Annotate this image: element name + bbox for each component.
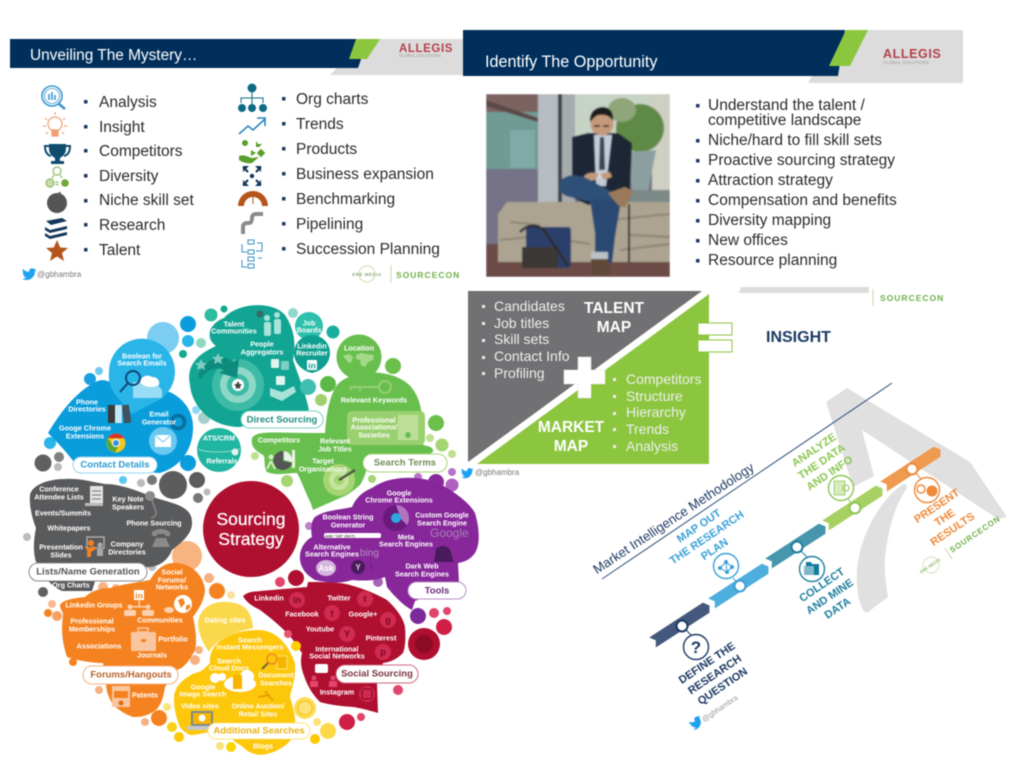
group: direct sourcing: Talent (224, 320, 245, 328)
step 5: present the results: RESULTS (929, 511, 977, 549)
list: left column: Insight (99, 119, 145, 136)
box: professional associations (347, 411, 425, 445)
panel: market intelligence methodology (590, 383, 1007, 731)
twitter handle (461, 468, 520, 478)
bubble: location: Location (344, 344, 374, 352)
bubble: linkedin recruiter: Linkedin (297, 342, 327, 350)
group: tools: Google (387, 488, 411, 498)
step 5: present the results: PRESENT (912, 487, 962, 526)
twitter handle (22, 268, 82, 280)
list: opportunity bullets: Compensation and benefits (708, 192, 897, 209)
icon: yahoo (351, 560, 373, 575)
step 4: analyze the data and info (788, 430, 886, 531)
icon: competitors pie (267, 450, 295, 470)
bubble: linkedin recruiter (294, 335, 330, 373)
pill: lists name generation (29, 563, 147, 581)
list: right column: Products (296, 141, 357, 158)
pill: forums hangouts: Forums/Hangouts (90, 670, 172, 680)
group: search terms: Relevant (320, 436, 351, 446)
icon: network (714, 554, 738, 578)
group: additional searches: Google (191, 682, 215, 692)
group: forums and hangouts: Professional (70, 616, 114, 626)
panel: identify the opportunity (463, 30, 963, 277)
icon: search bar: AND "OR" (NOT) (325, 534, 356, 538)
triangle: market map: Trends (626, 421, 669, 437)
step 3: collect and mine data: COLLECT (797, 566, 847, 605)
panel: talent map plus market map (461, 287, 944, 478)
group: contact details: Extensions (66, 432, 104, 440)
step 5: present the results (880, 444, 978, 549)
group: forums and hangouts: Networks (156, 582, 188, 592)
watermark: gray chevron logo (826, 388, 1007, 612)
icon: trends arrow (239, 118, 265, 134)
group: tools: Alternative (313, 542, 351, 552)
icon: research books (45, 218, 67, 239)
icon: social circles (289, 591, 396, 702)
twitter handle: @gbhambra (475, 468, 520, 477)
step 2: map out the research plan (660, 497, 772, 609)
panel: sourcing strategy bubble diagram (23, 305, 479, 755)
icon: linkedin with people: in (135, 590, 143, 600)
group: search terms: Organisations (299, 464, 347, 474)
icon: equals sign (698, 323, 732, 352)
group: additional searches (163, 602, 336, 755)
group: forums and hangouts: Patents (132, 690, 158, 700)
header bar: identify the opportunity (463, 30, 963, 83)
list: left column: Talent (99, 242, 141, 259)
triangle: market map: Structure (626, 388, 683, 404)
group: forums and hangouts: Portfolio (158, 634, 188, 644)
group: forums and hangouts: Journals (137, 650, 167, 660)
group: contact details: Boolean for (122, 352, 162, 360)
group: social sourcing (243, 570, 452, 730)
group: forums and hangouts (44, 541, 235, 726)
list: right column: Business expansion (296, 166, 434, 183)
step 4: analyze the data and info: AND INFO (804, 454, 856, 493)
group: additional searches: Online Auction/ (232, 702, 284, 710)
box: professional associations: Associations/ (351, 422, 397, 432)
list: left column: Competitors (99, 143, 183, 160)
icon: presenter (84, 537, 104, 557)
icon: laptop (186, 711, 214, 730)
icon: succession boxes (242, 240, 262, 268)
group: search terms: Relevant Keywords (341, 396, 407, 404)
group: forums and hangouts: Forums/ (158, 576, 186, 584)
icon: chrome logo (106, 434, 126, 452)
icon: cloud with docs (210, 670, 256, 692)
group: lists and name generation (23, 452, 210, 597)
icon: analysis magnifier (42, 86, 65, 109)
step 5: present the results: THE (933, 507, 957, 529)
group: social sourcing: Twitter (327, 594, 351, 602)
icon: magnifier document (262, 654, 287, 669)
group: lists and name generation: Key Note (112, 494, 144, 504)
icon: envelope with cloud (120, 371, 162, 398)
icon: insight light bulb (43, 112, 67, 136)
step 1: define the research question (649, 600, 753, 710)
group: tools (300, 468, 479, 610)
icon: dark red badge (408, 628, 440, 660)
group: contact details: Generator (142, 418, 176, 426)
logo: sourcecon top (739, 287, 944, 306)
logo: ere media sourcecon rotated (919, 514, 1002, 575)
icon: key (351, 381, 391, 393)
icon: pipeline (243, 214, 263, 234)
step 4: analyze the data and info: THE DATA (796, 442, 848, 482)
triangle: talent map: Job titles (494, 315, 549, 331)
icon: social circles: f (330, 609, 334, 619)
group: tools: Meta (398, 532, 415, 542)
step 2: map out the research plan: PLAN (699, 536, 731, 563)
group: social sourcing: Social Networks (309, 652, 365, 660)
triangle: talent map: TALENT (584, 300, 645, 317)
icon: clipboard (828, 476, 854, 500)
bubble: ats crm referrals: Referrals (206, 456, 238, 466)
group: contact details: Email (149, 410, 169, 418)
icon: email gear (149, 416, 184, 455)
group: additional searches: Search (238, 636, 262, 644)
panel: unveiling the mystery (10, 39, 463, 283)
bubble: job boards: Boards (297, 326, 321, 334)
icon: org chart (238, 84, 266, 112)
group: additional searches: Search (217, 656, 241, 666)
icon: yahoo: ! (369, 561, 373, 575)
group: tools: Generator (331, 520, 365, 530)
pill: lists name generation: Lists/Name Generation (36, 566, 140, 578)
header bar: unveiling the mystery (10, 39, 463, 75)
twitter handle rotated: @gbhambra (700, 693, 740, 724)
group: lists and name generation: Company (111, 540, 143, 548)
group: additional searches: Blogs (253, 742, 273, 750)
triangle: market map (477, 294, 709, 464)
group: direct sourcing: People (250, 340, 274, 348)
pill: social sourcing: Social Sourcing (341, 668, 413, 680)
list: opportunity bullets: competitive landscape (708, 112, 861, 129)
group: social sourcing: Instagram (320, 688, 354, 696)
group: search terms (251, 334, 456, 510)
icon: briefcase (131, 628, 156, 651)
group: social sourcing: Linkedin (254, 594, 284, 602)
icon: diversity circles (46, 167, 69, 187)
pill: additional searches (208, 723, 310, 739)
group: contact details: Search Emails (117, 358, 167, 368)
triangle: market map: MAP (554, 438, 588, 455)
triangle: talent map: Skill sets (494, 331, 549, 347)
bubble: linkedin recruiter: Recruiter (296, 348, 328, 358)
logo: ere media sourcecon (352, 265, 460, 283)
list: left column: Diversity (99, 168, 159, 185)
pill: direct sourcing (241, 411, 323, 428)
icon: social circles: Y (344, 629, 350, 639)
triangle: market map: Analysis (626, 438, 678, 454)
group: forums and hangouts: Memberships (69, 624, 115, 634)
group: forums and hangouts: Social (161, 568, 183, 576)
group: direct sourcing (179, 305, 340, 472)
group: additional searches: Retail Sites (239, 710, 277, 718)
list: opportunity bullets: Diversity mapping (708, 212, 831, 229)
icon: people talking (310, 664, 337, 687)
box: professional associations: Professional (352, 416, 396, 424)
icon: books (108, 405, 131, 423)
group: tools: Chrome Extensions (365, 496, 433, 504)
group: search terms: Job Titles (318, 444, 352, 454)
icon: telephone (152, 529, 170, 547)
bubble: location (336, 334, 382, 380)
logo: ere media sourcecon: SOURCECON (396, 270, 460, 280)
icon: lists document (85, 486, 103, 506)
icon: search bar (324, 533, 381, 538)
group: lists and name generation: Conference (39, 484, 79, 494)
icon: ask: Ask (318, 563, 334, 573)
group: forums and hangouts: Associations (77, 642, 121, 650)
group: search terms: Target (312, 456, 334, 466)
group: contact details: Phone (76, 398, 98, 406)
group: lists and name generation: Phone Sourcing (126, 518, 182, 528)
group: social sourcing: Pinterest (366, 634, 397, 642)
group: contact details: Googe Chrome (59, 424, 111, 432)
list: right column: Trends (296, 116, 344, 133)
icon: dark helmet (434, 546, 454, 562)
triangle: market map: Hierarchy (626, 404, 686, 420)
triangle: talent map: Profiling (494, 365, 545, 381)
pill: search terms (363, 454, 447, 472)
step 3: collect and mine data: AND MINE (804, 577, 856, 617)
header bar: identify the opportunity: GLOBAL SOLUTIONS (883, 60, 929, 65)
icon: products hand (239, 140, 265, 163)
twitter handle: @gbhambra (37, 270, 82, 279)
group: additional searches: Video sites (181, 702, 219, 710)
pill: tools (408, 582, 466, 599)
logo: sourcecon top: SOURCECON (880, 293, 944, 303)
step 1: define the research question: QUESTION (696, 666, 750, 708)
group: tools: Google (430, 526, 469, 540)
icon: niche skill set dial (47, 192, 67, 213)
list: opportunity bullets: New offices (708, 232, 788, 249)
group: forums and hangouts: Linkedin Groups (65, 600, 123, 610)
step 2: map out the research plan: MAP OUT (675, 507, 724, 545)
list: opportunity bullets (696, 97, 897, 269)
group: tools: Custom Google (415, 510, 469, 520)
list: right column: Benchmarking (296, 191, 395, 208)
group: search terms: Competitors (258, 436, 300, 444)
group: social sourcing: International (315, 644, 359, 654)
label: insight: INSIGHT (766, 329, 831, 346)
icon: crosshair target (323, 464, 355, 496)
pill: additional searches: Additional Searches (213, 726, 305, 736)
group: lists and name generation: Events/Summits (35, 508, 91, 518)
icon: social tiles (270, 359, 296, 401)
triangle: talent map: Candidates (494, 298, 565, 314)
bubble: ats crm referrals: ATS/CRM (203, 434, 235, 442)
icon: social circles: t (364, 594, 366, 604)
bubble: linkedin recruiter: in (308, 360, 316, 370)
icon: business expansion arrows (243, 166, 261, 186)
group: direct sourcing: Communities (211, 326, 257, 336)
center circle: sourcing strategy (203, 481, 299, 577)
group: contact details (44, 316, 210, 484)
pill: search terms: Search Terms (374, 458, 436, 468)
icon: target with arrow (195, 353, 264, 411)
icon: globe (164, 595, 192, 613)
icon: presentation (914, 478, 940, 502)
group: direct sourcing: Aggregators (241, 348, 283, 356)
list: opportunity bullets: Niche/hard to fill skill sets (708, 132, 882, 149)
group: tools: bing (360, 548, 379, 559)
list: opportunity bullets: Proactive sourcing strategy (708, 152, 895, 169)
step 2: map out the research plan: THE RESEARCH (668, 509, 746, 567)
list: opportunity bullets: Attraction strategy (708, 172, 833, 189)
icon: linkedin with people (124, 590, 154, 616)
rule under title (602, 383, 892, 579)
list: left column (84, 94, 194, 259)
step 4: analyze the data and info: ANALYZE (790, 431, 839, 470)
triangle: talent map: MAP (597, 319, 631, 336)
header bar: unveiling the mystery: GLOBAL SOLUTIONS (399, 53, 441, 58)
group: social sourcing: Youtube (306, 624, 334, 634)
header bar: unveiling the mystery: Unveiling The Mystery… (30, 47, 197, 64)
icon: folder (800, 556, 824, 582)
group: lists and name generation: Org Charts (52, 580, 90, 590)
list: left column: Analysis (99, 94, 157, 111)
group: lists and name generation: Speakers (112, 502, 144, 512)
twitter handle rotated (688, 693, 740, 731)
group: contact details: Directories (68, 404, 106, 414)
icon: benchmarking gauge (238, 191, 268, 206)
group: additional searches: Document (258, 670, 294, 680)
bubble: job boards (295, 312, 323, 340)
icon: talent star (46, 240, 68, 261)
icon: patent document (112, 686, 130, 707)
bubble: ats crm referrals (197, 428, 241, 472)
pill: forums hangouts (83, 666, 178, 684)
list: right column: Org charts (296, 91, 369, 108)
pill: contact details: Contact Details (80, 460, 150, 470)
icon: microphone (145, 491, 156, 518)
step 3: collect and mine data (765, 521, 864, 629)
group: tools: Boolean String (322, 512, 374, 522)
list: opportunity bullets: Resource planning (708, 252, 837, 269)
center circle: sourcing strategy: Strategy (218, 529, 284, 549)
icon: gavel (258, 691, 273, 701)
list: left column: Niche skill set (99, 192, 194, 209)
icon: competitors trophy (45, 144, 70, 164)
group: additional searches: Searches (260, 678, 292, 688)
triangle: talent map: Contact Info (494, 348, 570, 364)
group: additional searches: Instant Messengers (216, 642, 284, 652)
triangle: market map: MARKET (538, 419, 605, 436)
icon: plus sign (564, 357, 605, 398)
group: tools: Search Engine (417, 518, 467, 528)
group: forums and hangouts: Communities (137, 616, 183, 624)
group: additional searches: Cloud Docs (209, 664, 249, 672)
group: lists and name generation: Presentation (39, 542, 83, 552)
bubble: dating sites (198, 602, 253, 652)
header bar: identify the opportunity: ALLEGIS (883, 47, 941, 61)
photo: man with tablet on stone bench (486, 94, 670, 277)
icon: question mark: ? (691, 638, 701, 657)
pill: social sourcing (336, 665, 418, 683)
triangle: talent map (468, 291, 702, 462)
box: professional associations: Societies (358, 430, 390, 440)
group: tools: Dark Web (405, 562, 439, 570)
icon: rss bubble (294, 697, 316, 719)
icon: social circles: p (380, 647, 386, 657)
header bar: unveiling the mystery: ALLEGIS (399, 43, 453, 55)
group: social sourcing: Google+ (349, 610, 377, 618)
icon: people (256, 310, 281, 336)
list: left column: Research (99, 217, 165, 234)
step 3: collect and mine data: DATA (822, 596, 853, 622)
icon: social circles: g (385, 615, 391, 625)
group: lists and name generation: Directories (108, 548, 146, 556)
logo: ere media sourcecon: ERE MEDIA (352, 272, 382, 277)
group: tools: Search Engines (379, 540, 433, 548)
icon: ask (316, 560, 336, 576)
list: opportunity bullets: Understand the talent / (708, 97, 866, 114)
bubble: job boards: Job (303, 318, 316, 328)
icon: dark chrome (383, 505, 409, 531)
icon: social circles: in (293, 595, 301, 605)
group: additional searches: Image Search (180, 690, 226, 698)
logo: ere media sourcecon rotated: ERE MEDIA (919, 557, 941, 575)
group: tools: Search Engines (395, 570, 449, 578)
logo: ere media sourcecon rotated: SOURCECON (948, 514, 1002, 555)
list: right column: Succession Planning (296, 241, 440, 258)
pill: contact details (73, 457, 157, 473)
triangle: market map: Competitors (626, 371, 701, 387)
list: right column: Pipelining (296, 216, 363, 233)
title: market intelligence methodology: Market Intelligence Methodology (590, 459, 757, 577)
list: right column (282, 91, 440, 258)
step 1: define the research question: DEFINE THE (677, 640, 738, 687)
step 1: define the research question: RESEARCH (686, 653, 744, 697)
bubble: dating sites: Dating sites (205, 616, 245, 624)
group: tools: Search Engines (305, 550, 359, 558)
header bar: identify the opportunity: Identify The Opportunity (485, 53, 658, 71)
group: lists and name generation: Whitepapers (47, 524, 91, 532)
icon: yahoo: Y (355, 563, 361, 572)
pill: tools: Tools (425, 586, 449, 596)
pill: direct sourcing: Direct Sourcing (247, 414, 318, 426)
group: lists and name generation: Attendee Lists (34, 492, 84, 502)
group: social sourcing: Facebook (285, 610, 319, 618)
center circle: sourcing strategy: Sourcing (216, 509, 286, 529)
group: lists and name generation: Slides (50, 550, 72, 560)
